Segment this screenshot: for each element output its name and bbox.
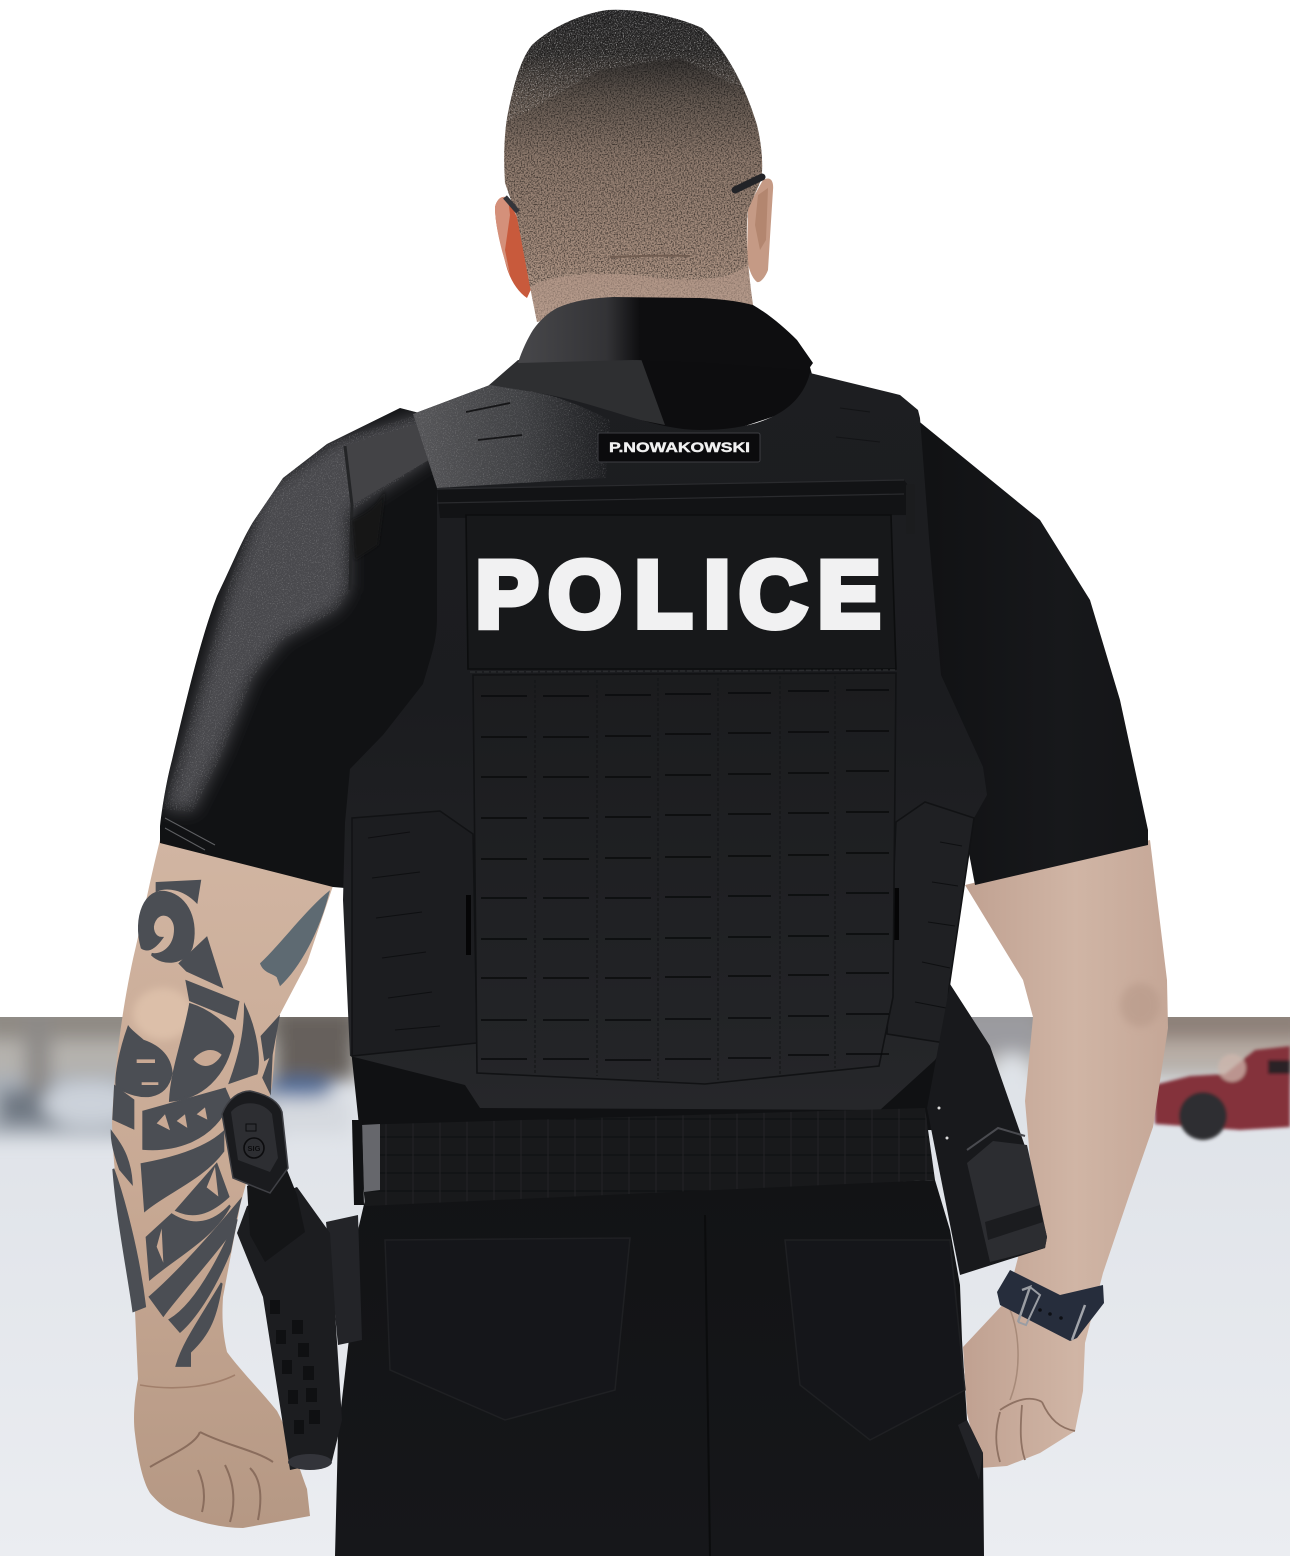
- knuckle creases: [150, 1432, 273, 1522]
- sunlit left shoulder strap: [413, 385, 610, 488]
- right arm and fist: [963, 840, 1168, 1468]
- polo collar and inner shirt: [488, 297, 813, 430]
- right shirt sleeve: [905, 410, 1148, 885]
- holster mount: [326, 1215, 362, 1345]
- pistol grip: [247, 1165, 305, 1262]
- sunglasses temple: [735, 177, 762, 190]
- magazine base with logo: [222, 1091, 288, 1193]
- right ear: [747, 178, 773, 282]
- head with fade haircut: [495, 0, 775, 330]
- red car in the background: [1154, 1046, 1290, 1140]
- pistol in holster: SIG: [248, 1144, 261, 1153]
- left shirt sleeve with sunlit shoulder: [160, 408, 437, 888]
- tribal tattoo: [112, 881, 330, 1366]
- back pockets: [385, 1238, 630, 1420]
- zipper pocket: [437, 480, 912, 518]
- POLICE lettering: POLICE: [476, 542, 880, 646]
- holster body: [237, 1187, 342, 1470]
- pistol in holster: [222, 1091, 362, 1470]
- background photo: blurred parking lot: [0, 1000, 1290, 1556]
- black undershirt below vest: [350, 1020, 950, 1135]
- left wing panel: [352, 811, 477, 1056]
- zipper pull: [906, 484, 915, 534]
- skull and neck: [504, 10, 762, 322]
- duty belt: [352, 1108, 935, 1206]
- left ear: [495, 197, 532, 298]
- ballistic vest carrier: [343, 373, 987, 1110]
- right wing panel: [887, 802, 974, 1043]
- left arm with tribal tattoo sleeve: [112, 840, 335, 1528]
- name patch: P.NOWAKOWSKI: [609, 440, 750, 455]
- right belt pouch: [927, 984, 1047, 1275]
- police flap: [466, 515, 896, 669]
- trousers: [335, 1180, 984, 1556]
- icon: wristwatch band: [997, 1270, 1104, 1341]
- name patch: [598, 433, 760, 462]
- laser-cut MOLLE panel: [473, 673, 896, 1084]
